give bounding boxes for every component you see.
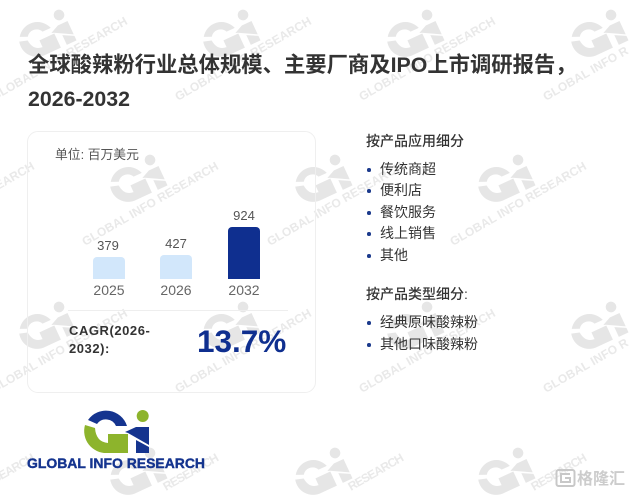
- watermark pattern: RESEARCH: [346, 450, 406, 494]
- watermark pattern: GLOBAL INFO RESEARCH: [80, 159, 221, 249]
- heading: 按产品类型细分:: [366, 286, 468, 302]
- watermark pattern: GLOBAL INFO RESEARCH: [448, 159, 589, 249]
- watermark pattern: RESEARCH: [160, 450, 221, 494]
- watermark pattern: GLOBAL INFO RESEARCH: [356, 306, 498, 396]
- CAGR label: CAGR(2026-: [69, 323, 150, 338]
- badge: Gelonghui: 格隆汇: [577, 469, 625, 488]
- title: 2026-2032: [28, 87, 130, 111]
- item: 便利店: [380, 182, 422, 198]
- heading: 按产品应用细分: [366, 133, 464, 149]
- panel: market size: [27, 131, 316, 393]
- unit label: 单位: 百万美元: [55, 147, 139, 162]
- bullet: [367, 189, 370, 192]
- bullet: [367, 232, 370, 236]
- title: [28, 53, 577, 111]
- logo: Global Info Research: GLOBAL INFO RESEARCH: [27, 455, 205, 471]
- value 427: 427: [165, 236, 187, 251]
- CAGR value: 13.7%: [197, 323, 286, 359]
- CAGR label: [69, 323, 150, 356]
- bar chart: [93, 208, 260, 298]
- item: 线上销售: [380, 225, 436, 241]
- bar 2025: [93, 257, 125, 278]
- value 924: 924: [233, 208, 255, 223]
- bullet: [367, 343, 370, 346]
- item: 其他: [380, 247, 408, 263]
- bar 2032: [228, 226, 260, 278]
- bullet: [367, 321, 370, 324]
- text block: by application: [366, 133, 464, 263]
- value 379: 379: [97, 238, 119, 253]
- bullet: [367, 254, 370, 258]
- item: 传统商超: [380, 161, 436, 177]
- item: 其他口味酸辣粉: [380, 336, 478, 352]
- divider: [68, 310, 288, 311]
- watermark pattern: GLOBAL INFO RESEARCH: [172, 306, 314, 396]
- bar 2026: [160, 254, 192, 278]
- year 2026: 2026: [160, 282, 192, 298]
- year 2032: 2032: [228, 282, 260, 298]
- item: 经典原味酸辣粉: [380, 314, 478, 330]
- item: 餐饮服务: [380, 204, 436, 220]
- watermark pattern: GLOBAL INFO R: [540, 335, 630, 396]
- watermark pattern: GLOBAL INFO RESEARCH: [264, 159, 406, 249]
- watermark pattern: GLOBAL INFO RESEARCH: [356, 14, 498, 104]
- text block: by type: [366, 286, 478, 352]
- title: 全球酸辣粉行业总体规模、主要厂商及IPO上市调研报告，: [28, 53, 577, 77]
- year 2025: 2025: [93, 282, 125, 298]
- bullet: [367, 168, 370, 172]
- watermark pattern: RESEARCH: [528, 450, 589, 494]
- CAGR label: 2032):: [69, 341, 110, 356]
- bullet: [367, 211, 370, 214]
- watermark pattern: GLOBAL INFO RESEARCH: [172, 14, 314, 104]
- watermark pattern: GLOBAL INFO R: [540, 43, 630, 104]
